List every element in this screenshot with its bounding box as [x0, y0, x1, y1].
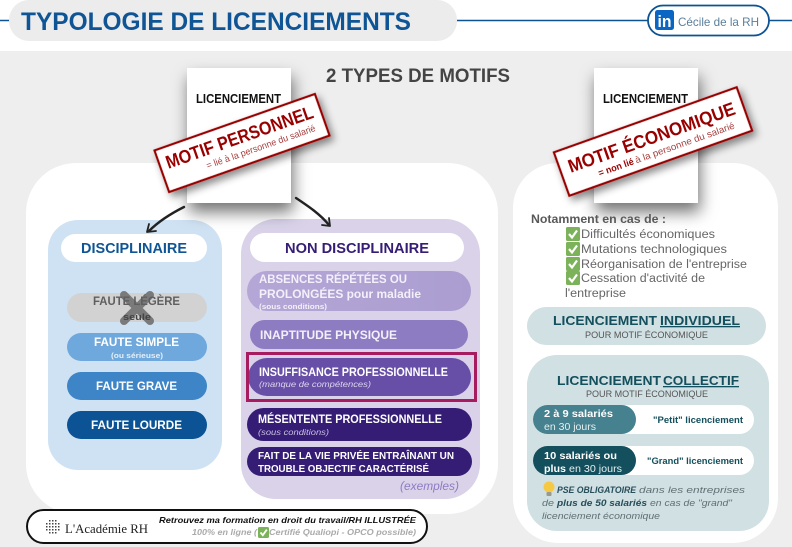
text block: pse obligatoire: en cas de "grand": [650, 498, 733, 509]
row: grand licenciement: en 30 jours: [569, 464, 622, 475]
row: petit licenciement: [533, 405, 754, 434]
stamp: motif personnel: MOTIF PERSONNEL: [163, 101, 316, 173]
exemples note: (exemples): [400, 481, 459, 493]
check: certifie: [258, 527, 269, 538]
text block: notamment en cas de: Difficultés économiques: [581, 229, 715, 241]
linkedin badge: [648, 6, 769, 36]
absences repetees: [247, 271, 471, 311]
panel: non disciplinaire: [241, 219, 480, 499]
faute simple: (ou sérieuse): [111, 351, 164, 360]
title: [9, 0, 457, 41]
document: motif economique: [594, 68, 698, 203]
footer banner: Retrouvez ma formation en droit du travail/RH ILLUSTRÉE: [159, 515, 416, 525]
text block: notamment en cas de: [531, 214, 747, 300]
check: reorganisation: [566, 257, 580, 271]
absences repetees: PROLONGÉES pour maladie: [259, 288, 421, 301]
inaptitude physique: [250, 320, 468, 349]
text block: notamment en cas de: Réorganisation de l'entreprise: [581, 259, 747, 271]
absences repetees: ABSENCES RÉPÉTÉES OU: [259, 273, 407, 286]
text block: pse obligatoire: plus de 50 salariés: [556, 498, 647, 509]
text block: pse obligatoire: [542, 485, 745, 522]
header line: [0, 20, 792, 22]
fait de la vie privee: [247, 447, 472, 476]
row: grand licenciement: 10 salariés ou: [544, 451, 617, 462]
footer banner: L'Académie RH: [65, 521, 148, 536]
text block: pse obligatoire: PSE OBLIGATOIRE: [557, 485, 637, 496]
inaptitude physique: INAPTITUDE PHYSIQUE: [260, 328, 397, 342]
row: petit licenciement: en 30 jours: [544, 422, 596, 433]
panel: left white card: [26, 163, 498, 514]
text block: pse obligatoire: de: [542, 498, 554, 509]
arrow: to disciplinaire: [147, 207, 184, 232]
heading: 2 types de motifs: 2 TYPES DE MOTIFS: [326, 66, 510, 87]
panel: licenciement collectif: [527, 355, 769, 531]
fait de la vie privee: TROUBLE OBJECTIF CARACTÉRISÉ: [258, 462, 429, 475]
non disciplinaire header: NON DISCIPLINAIRE: [285, 241, 429, 257]
insuffisance professionnelle: (manque de compétences): [259, 379, 371, 389]
disciplinaire header: DISCIPLINAIRE: [81, 241, 187, 257]
faute simple: FAUTE SIMPLE: [94, 335, 179, 349]
icon: light bulb: [544, 482, 554, 496]
panel: licenciement individuel: [527, 307, 766, 345]
stamp: motif personnel: = lié à la personne du salarié: [205, 123, 317, 172]
insuffisance professionnelle: INSUFFISANCE PROFESSIONNELLE: [259, 367, 448, 379]
arrow: to non disciplinaire: [296, 198, 330, 226]
linkedin badge: in: [658, 12, 672, 31]
faute grave: [67, 372, 207, 400]
text block: notamment en cas de: Notamment en cas de :: [531, 214, 666, 226]
linkedin badge: Cécile de la RH: [678, 15, 759, 29]
disciplinaire header: [61, 234, 207, 262]
non disciplinaire header: [250, 233, 464, 262]
document: motif personnel: LICENCIEMENT: [196, 92, 281, 106]
document: motif economique: LICENCIEMENT: [603, 92, 688, 106]
row: petit licenciement: "Petit" licenciement: [653, 415, 743, 425]
icon: academie logo: [46, 520, 60, 534]
check: mutations: [566, 242, 580, 256]
footer banner: Certifié Qualiopi - OPCO possible): [269, 527, 416, 537]
faute legere: seule: [123, 312, 151, 323]
row: grand licenciement: [533, 446, 754, 475]
highlight frame: [248, 354, 476, 400]
panel: licenciement individuel: LICENCIEMENT: [553, 313, 657, 328]
stamp: motif economique: MOTIF ÉCONOMIQUE: [565, 98, 738, 177]
panel: licenciement collectif: COLLECTIF: [663, 373, 739, 388]
panel: right white card: [513, 163, 778, 543]
absences repetees: (sous conditions): [259, 304, 327, 311]
footer banner: 100% en ligne (: [192, 527, 258, 537]
text block: notamment en cas de: l'entreprise: [565, 288, 626, 300]
faute lourde: [67, 411, 207, 439]
panel: licenciement individuel: INDIVIDUEL: [660, 313, 740, 328]
panel: licenciement collectif: LICENCIEMENT: [557, 373, 661, 388]
stamp: motif economique: à la personne du salarié: [634, 121, 736, 166]
faute legere: [67, 293, 207, 323]
faute grave: FAUTE GRAVE: [96, 379, 177, 393]
panel: licenciement individuel: POUR MOTIF ÉCONOMIQUE: [585, 330, 708, 340]
text block: notamment en cas de: Cessation d'activité de: [581, 273, 705, 285]
faute simple: [67, 333, 207, 361]
text block: notamment en cas de: Mutations technologiques: [581, 244, 727, 256]
stamp: motif economique: = non lié: [597, 156, 635, 179]
row: petit licenciement: 2 à 9 salariés: [544, 409, 613, 420]
text block: pse obligatoire: licenciement économique: [542, 511, 660, 522]
text block: pse obligatoire: dans les entreprises: [639, 485, 745, 496]
document: motif personnel: [187, 68, 291, 203]
footer banner: [27, 510, 427, 543]
mesentente professionnelle: MÉSENTENTE PROFESSIONNELLE: [258, 413, 442, 426]
row: grand licenciement: plus: [544, 464, 566, 475]
row: grand licenciement: "Grand" licenciement: [647, 456, 743, 466]
title: TYPOLOGIE DE LICENCIEMENTS: [21, 8, 411, 36]
insuffisance professionnelle: [248, 358, 471, 396]
panel: licenciement collectif: POUR MOTIF ÉCONOMIQUE: [586, 389, 708, 399]
fait de la vie privee: FAIT DE LA VIE PRIVÉE ENTRAÎNANT UN: [258, 449, 454, 462]
mesentente professionnelle: [247, 408, 472, 441]
faute lourde: FAUTE LOURDE: [91, 418, 182, 432]
faute legere: FAUTE LÉGÈRE: [93, 293, 180, 308]
panel: disciplinaire: [48, 220, 222, 470]
check: difficultes: [566, 227, 580, 241]
mesentente professionnelle: (sous conditions): [258, 427, 329, 437]
check: cessation: [566, 271, 580, 285]
